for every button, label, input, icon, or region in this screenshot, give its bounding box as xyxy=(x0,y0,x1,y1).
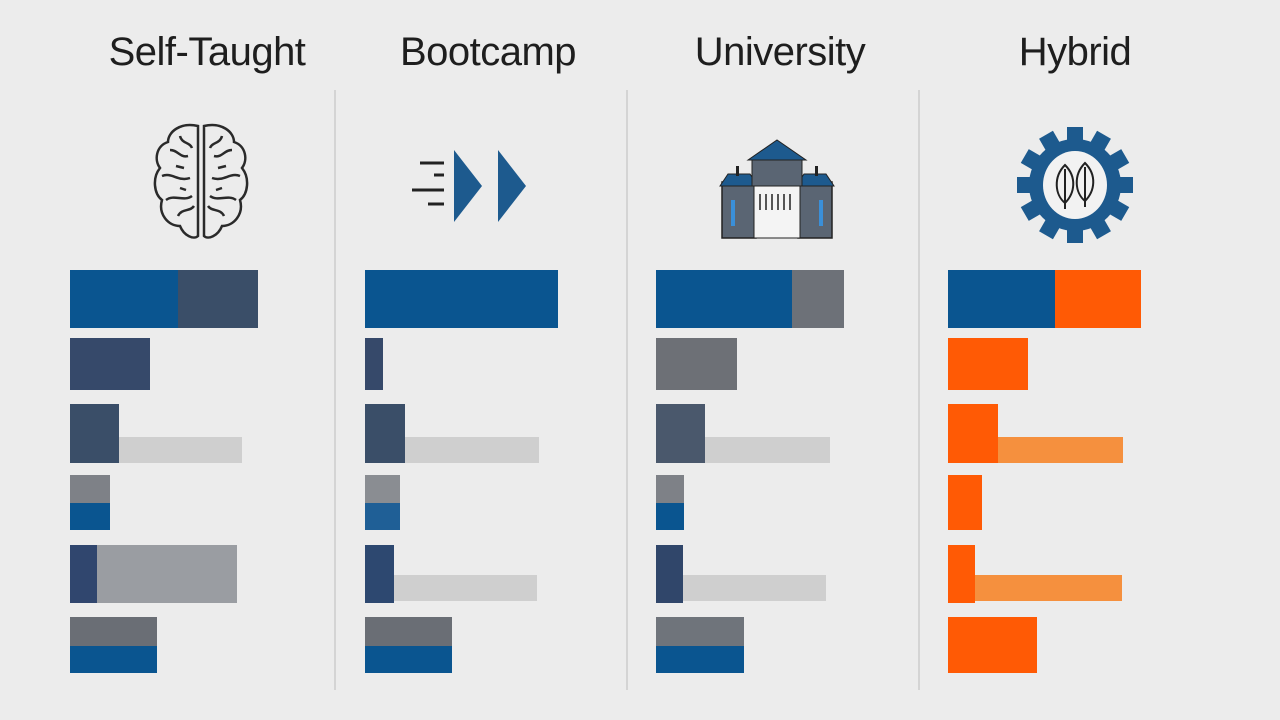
icon: university building xyxy=(719,139,835,239)
title: Bootcamp: Bootcamp xyxy=(400,30,576,74)
icon: fast-forward arrows xyxy=(412,150,526,222)
chart: Bootcamp bars xyxy=(365,270,558,673)
icon: gear with leaves xyxy=(1017,127,1133,243)
title: University: University xyxy=(695,30,865,74)
icon: brain xyxy=(154,124,248,239)
title: Hybrid: Hybrid xyxy=(1019,30,1131,74)
chart: University bars xyxy=(656,270,844,673)
title: Self-Taught: Self-Taught xyxy=(109,30,305,74)
chart: Self-Taught bars xyxy=(70,270,258,673)
